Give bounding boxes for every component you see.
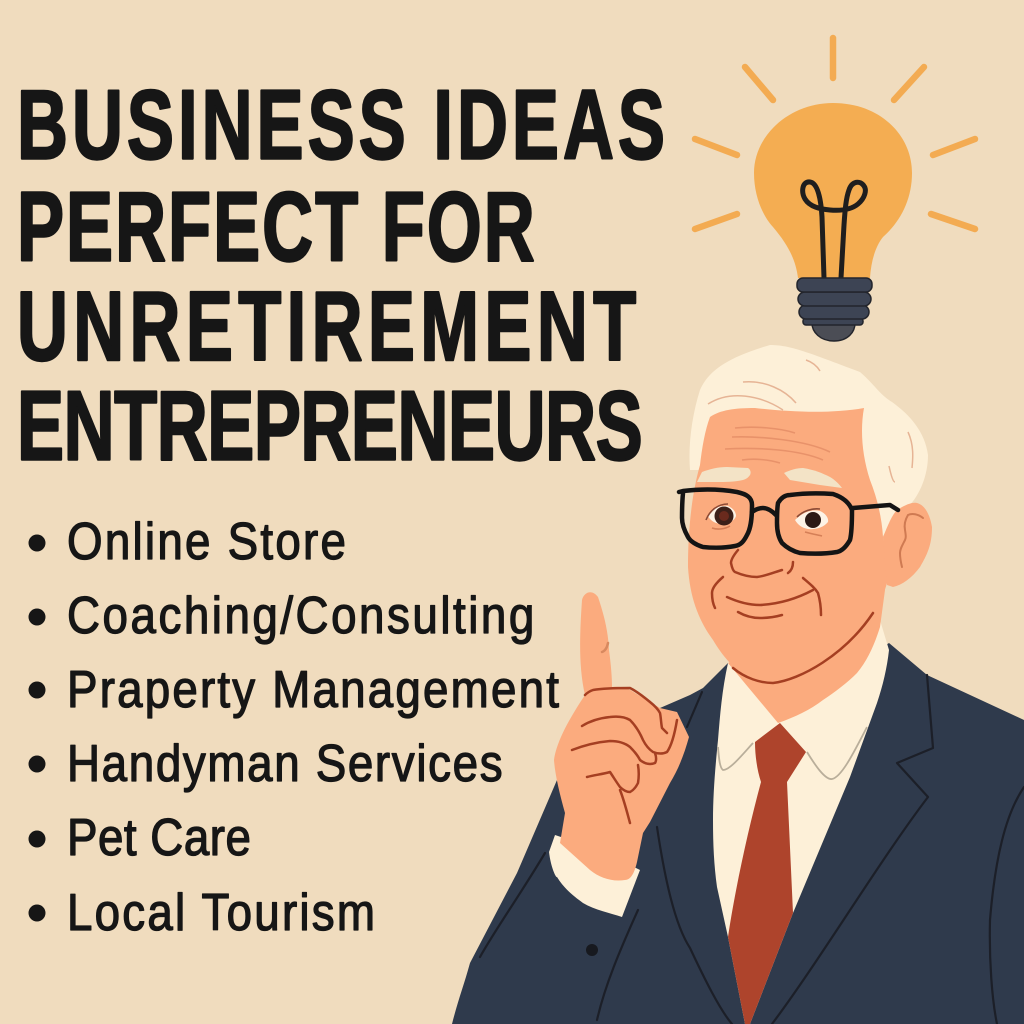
jaw line xyxy=(733,613,873,683)
title: PERFECT FOR xyxy=(17,173,535,282)
list item: online store: Online Store xyxy=(67,513,346,571)
filament xyxy=(803,182,865,278)
bulb glass xyxy=(754,103,912,278)
bulb rays xyxy=(695,38,975,229)
neck xyxy=(728,590,885,723)
eyes xyxy=(706,504,828,536)
title: BUSINESS IDEAS xyxy=(17,71,665,180)
hand xyxy=(554,592,689,881)
illustration: pointing older man xyxy=(452,345,1024,1024)
eyebrows xyxy=(697,467,751,482)
list item: coaching/consulting: Coaching/Consulting xyxy=(67,587,534,645)
necktie xyxy=(728,723,806,1024)
title: ENTREPRENEURS xyxy=(17,372,643,481)
bulb base xyxy=(797,278,872,341)
forehead wrinkles xyxy=(725,427,830,463)
list item: pet care: Pet Care xyxy=(67,809,251,867)
ear line xyxy=(900,514,923,567)
nose xyxy=(731,550,793,577)
jacket seam lines xyxy=(480,675,1024,1024)
ear xyxy=(883,503,932,587)
face xyxy=(688,408,887,682)
shirt xyxy=(713,620,889,1024)
smile and mouth xyxy=(712,577,821,618)
finger lines xyxy=(572,643,677,823)
icon: light bulb xyxy=(695,38,975,341)
bullet list xyxy=(28,513,559,942)
list item: property management: Praperty Management xyxy=(67,661,559,719)
list item: local tourism: Local Tourism xyxy=(67,884,375,942)
glasses xyxy=(679,490,898,554)
title xyxy=(17,71,665,481)
jacket button xyxy=(586,944,598,956)
shirt cuff xyxy=(549,835,640,917)
list item: handyman services: Handyman Services xyxy=(67,735,503,793)
hair strands xyxy=(708,360,913,482)
hair xyxy=(689,345,928,537)
title: UNRETIREMENT xyxy=(17,273,636,382)
collar lines xyxy=(718,727,867,779)
suit jacket xyxy=(452,643,1024,1024)
